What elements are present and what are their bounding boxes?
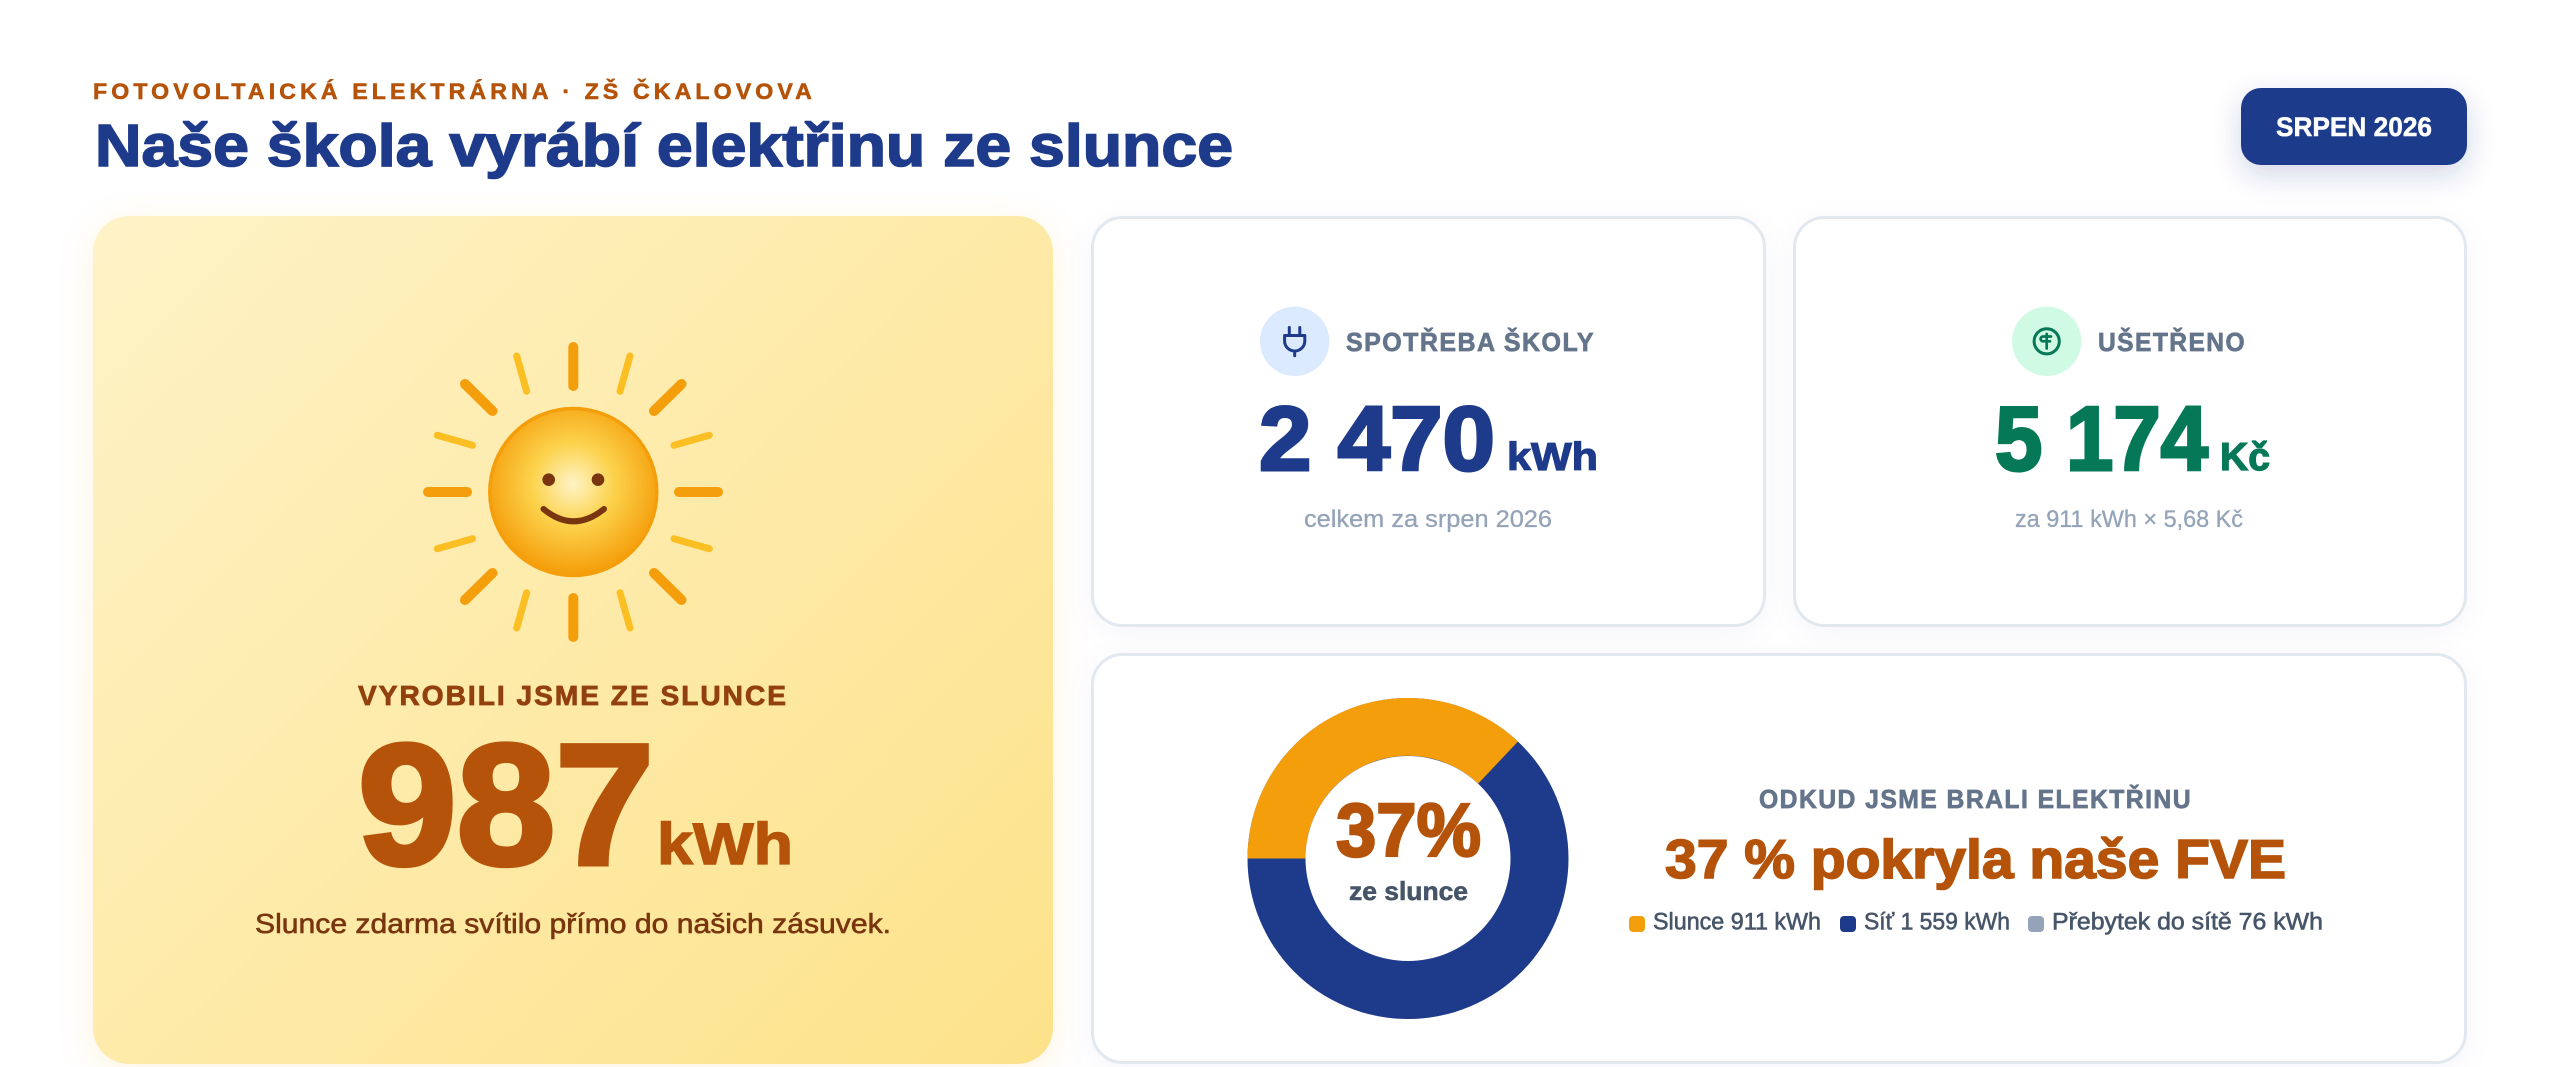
icon: smiling sun [428, 347, 718, 637]
legend: Přebytek do sítě 76 kWh [2052, 908, 2323, 936]
consumption label: SPOTŘEBA ŠKOLY [1346, 327, 1595, 357]
header eyebrow: FOTOVOLTAICKÁ ELEKTRÁRNA · ZŠ ČKALOVOVA [93, 79, 816, 104]
panel: solar production [93, 216, 1053, 1064]
production label: VYROBILI JSME ZE SLUNCE [358, 680, 788, 711]
consumption value: 2 470 [1259, 389, 1495, 490]
savings note: za 911 kWh × 5,68 Kč [2015, 506, 2243, 533]
savings label: UŠETŘENO [2098, 327, 2246, 357]
icon: plug [1260, 307, 1329, 376]
sources label: ODKUD JSME BRALI ELEKTŘINU [1759, 784, 2192, 814]
production value: 987 [358, 709, 654, 901]
icon: coin [2012, 307, 2081, 376]
savings value: Kč [2220, 436, 2270, 479]
legend [1629, 908, 2323, 936]
month badge: SRPEN 2026 [2276, 112, 2432, 142]
donut caption: ze slunce [1349, 876, 1468, 906]
consumption value [1259, 389, 1598, 490]
consumption value: kWh [1507, 436, 1598, 479]
title: Naše škola vyrábí elektřinu ze slunce [95, 113, 1233, 179]
panel: savings [1794, 218, 2466, 626]
donut percent: 37% [1336, 788, 1481, 872]
savings value: 5 174 [1995, 389, 2208, 490]
panel: school consumption [1092, 218, 1764, 626]
month badge [2241, 88, 2467, 165]
donut chart [1247, 698, 1568, 1019]
sources headline: 37 % pokryla naše FVE [1665, 828, 2286, 890]
panel: energy sources [1092, 654, 2466, 1062]
production value: kWh [657, 812, 793, 877]
consumption note: celkem za srpen 2026 [1304, 506, 1552, 533]
production note: Slunce zdarma svítilo přímo do našich zásuvek. [255, 908, 891, 939]
legend: Síť 1 559 kWh [1864, 908, 2010, 936]
production value [358, 709, 793, 901]
legend: Slunce 911 kWh [1653, 908, 1821, 936]
